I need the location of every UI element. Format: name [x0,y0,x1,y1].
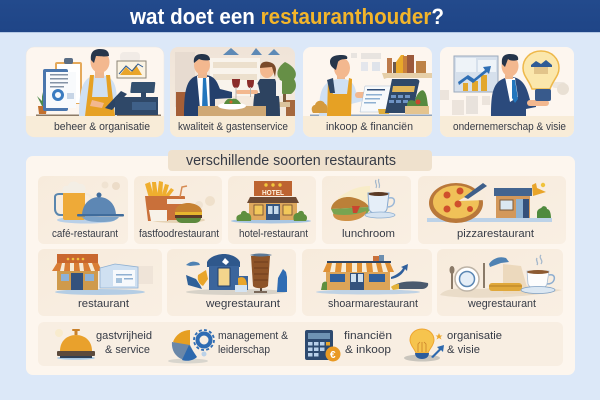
tile: wegrestaurant met servies: wegrestaurant [467,298,536,310]
tile: fastfoodrestaurant: fastfoodrestaurant [139,228,219,240]
tile: pizzarestaurant: pizzarestaurant [457,228,534,240]
title banner [0,0,600,33]
icon: coffee cup [521,255,555,294]
icon: sandwich [331,197,370,221]
title: wat doet een restauranthouder? [129,4,444,29]
skill: gastvrijheid & service [55,329,152,360]
tile: restaurant [38,249,162,316]
icon: light bulb with restaurant [523,51,559,101]
panel: kwaliteit & gastenservice [170,47,296,137]
icon: entrepreneur [491,54,549,116]
tile: shoarmarestaurant: shoarmarestaurant [328,298,418,310]
icon: coffee cup [365,179,395,218]
tile: lunchroom [322,176,411,244]
icon: manager with apron [79,49,127,116]
icon: shelf with bottles [382,55,432,79]
icon: shoarma spit [250,254,272,292]
icon: pancakes [489,283,522,291]
heading [168,150,432,171]
tile: café-restaurant: café-restaurant [52,228,118,240]
skill: management & leiderschap [168,330,289,364]
skill: gastvrijheid & service: & service [105,344,150,356]
icon: road arrows [186,262,208,289]
icon: chart frame [117,61,146,78]
icon: burger [175,203,202,223]
label: ondernemerschap & visie [453,121,566,133]
icon: pie chart and gear [168,330,214,364]
tile: hotel-restaurant [228,176,316,244]
skills strip [38,322,563,366]
icon: wine glasses [232,79,254,99]
icon: grill [391,281,428,290]
icon: bushes [236,211,307,221]
tile: wegrestaurant met servies [437,249,563,316]
icon: beer mug [55,182,91,220]
tile: wegrestaurant met shoarma [167,249,296,316]
icon: waitress [236,62,282,116]
icon: bread [312,101,327,113]
skill: financiën & inkoop: & inkoop [345,344,391,356]
tile: wegrestaurant met shoarma: wegrestaurant [205,298,280,310]
label: beheer & organisatie [54,121,150,133]
skill: gastvrijheid & service: gastvrijheid [96,330,152,342]
icon: window with growth chart [454,56,498,92]
tile: pizzarestaurant [418,176,566,244]
skill: financiën & inkoop: financiën [344,330,392,342]
panel: beheer & organisatie [26,47,164,137]
icon: calculator [385,79,419,113]
tile: hotel-restaurant: hotel-restaurant [239,228,308,240]
icon: plant [277,62,296,107]
icon: crate with vegetables [405,90,429,114]
tile: shoarmarestaurant [302,249,432,316]
icon: roadside building [207,254,248,292]
icon: growth arrow [391,264,408,279]
icon: cash register [115,82,158,115]
icon: sauce bottle [277,269,287,292]
icon: buyer with apron [319,55,366,116]
label: inkoop & financiën [326,121,413,133]
icon: clipboard and tablet [43,58,82,111]
label: kwaliteit & gastenservice [178,121,288,133]
icon: restaurant building [321,255,394,290]
panel: ondernemerschap & visie [440,47,574,137]
icon: restaurant building [52,254,102,290]
tile: fastfoodrestaurant [134,176,222,244]
skill: management & leiderschap: management & [218,330,289,342]
tile: restaurant: restaurant [78,298,129,310]
icon: businessman [184,54,232,116]
icon: service bell [57,329,95,360]
icon: table with plate [198,99,266,116]
heading: verschillende soorten restaurants [186,153,396,169]
icon: pizza [429,183,487,223]
icon: cap shape [489,257,509,267]
panel: inkoop & financiën [303,47,432,137]
icon: calculator with euro coin: € [330,350,336,361]
icon: plant [37,92,48,114]
icon: serving cloche [77,192,124,222]
icon: drink [167,186,187,220]
skill: organisatie & visie: & visie [447,344,480,356]
icon: invoice [360,86,392,114]
tile: café-restaurant [38,176,128,244]
icon: hotel building: HOTEL [262,190,285,197]
icon: pizzeria building [494,183,551,218]
tile: lunchroom: lunchroom [342,228,395,240]
icon: fries [145,181,174,221]
icon: chair [176,92,186,116]
skill: financiën & inkoop [305,330,392,362]
icon: light bulb with arrow [404,329,444,362]
icon: menu board [100,264,138,288]
skill: organisatie & visie [404,329,502,362]
icon: plate and cutlery [450,263,485,291]
skill: management & leiderschap: leiderschap [218,344,270,356]
skill: organisatie & visie: organisatie [447,330,502,342]
panel: soorten restaurants [26,150,575,375]
